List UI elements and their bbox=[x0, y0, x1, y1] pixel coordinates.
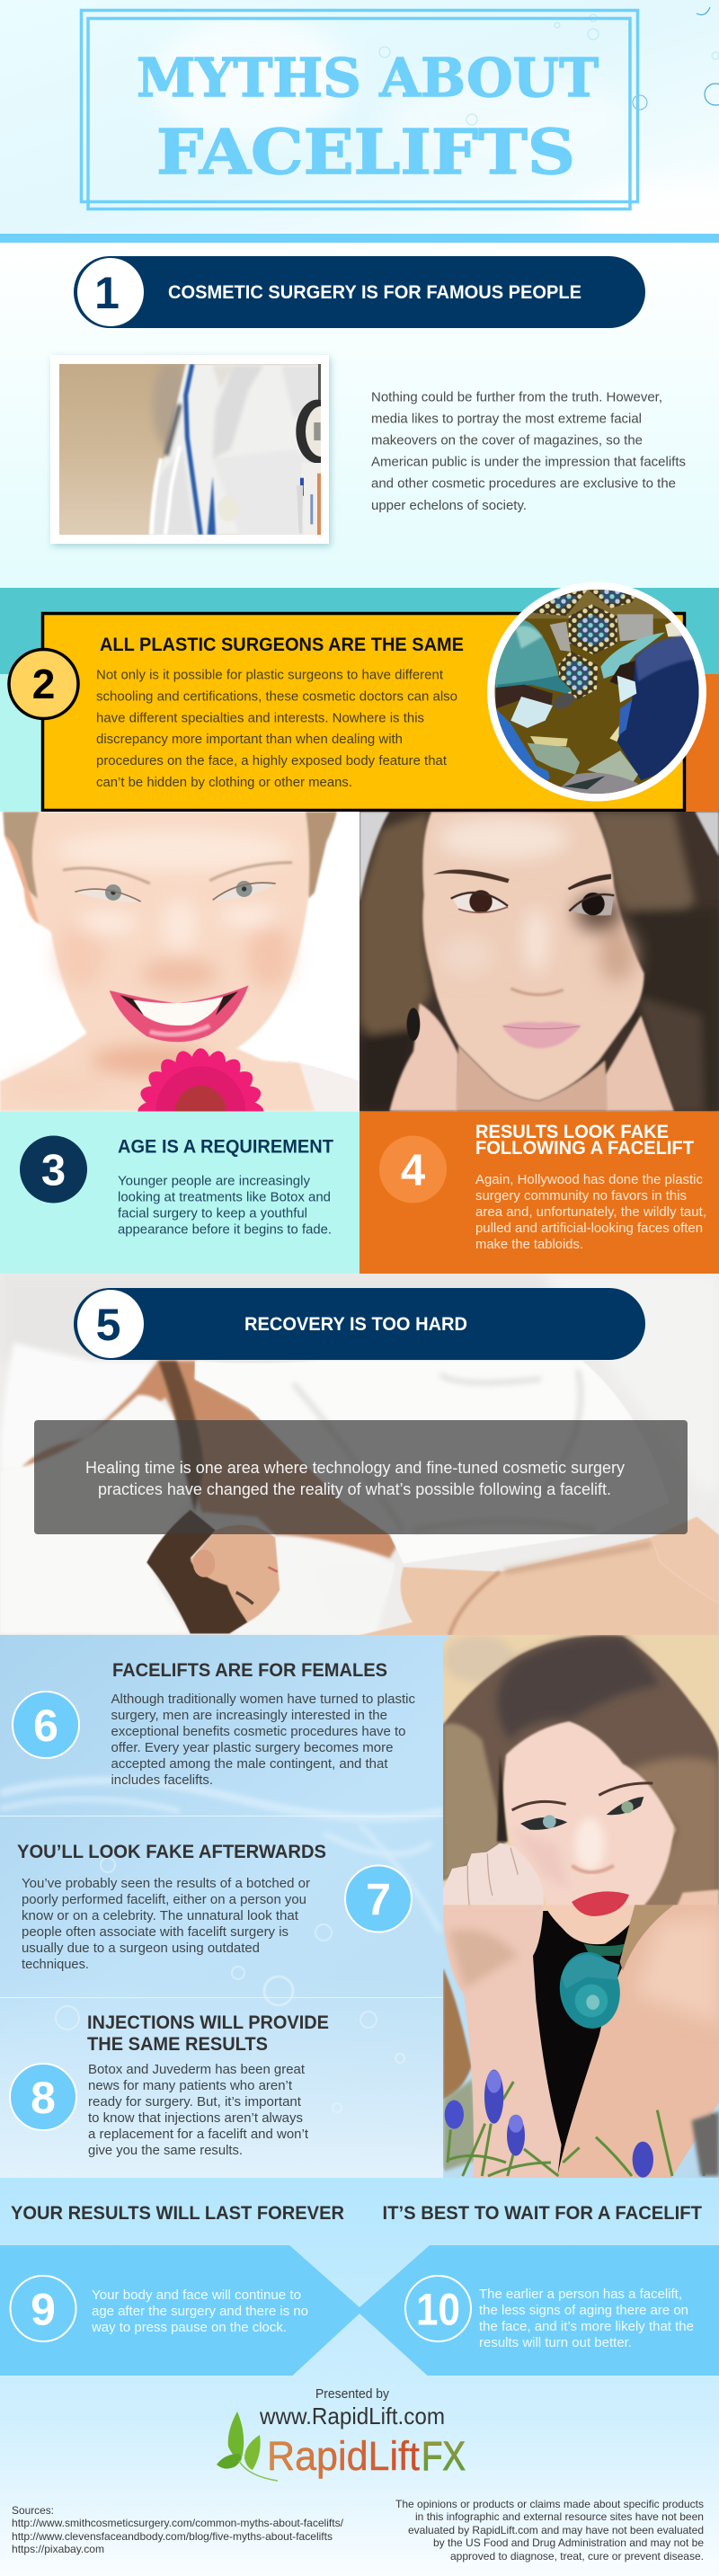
myth 6 body text: offer. Every year plastic surgery becomes more bbox=[111, 1741, 394, 1755]
myth 9 heading: YOUR RESULTS WILL LAST FOREVER bbox=[11, 2203, 344, 2224]
myth 7 number badge bbox=[345, 1866, 412, 1932]
myth 9 body text: Your body and face will continue to bbox=[92, 2288, 301, 2303]
myth 4 number badge bbox=[379, 1136, 447, 1203]
myth 1 body text: and other cosmetic procedures are exclusive to the bbox=[371, 476, 676, 492]
sources bbox=[12, 2504, 344, 2555]
myth 1 pill heading bbox=[74, 256, 645, 328]
myth 1 body text: upper echelons of society. bbox=[371, 498, 527, 513]
myth 8 number badge: 8 bbox=[31, 2073, 56, 2123]
myth 8 heading bbox=[87, 2012, 329, 2055]
myth 3 heading: AGE IS A REQUIREMENT bbox=[118, 1136, 333, 1157]
myth 5 pill heading bbox=[74, 1288, 645, 1360]
myth 4 body text: pulled and artificial-looking faces often bbox=[475, 1221, 703, 1236]
myth 10 heading: IT’S BEST TO WAIT FOR A FACELIFT bbox=[383, 2203, 702, 2224]
myth 4 heading: RESULTS LOOK FAKE bbox=[475, 1122, 669, 1142]
myth 2 body text: Not only is it possible for plastic surgeons to have different bbox=[96, 668, 444, 683]
myth 8 body text: give you the same results. bbox=[88, 2144, 243, 2158]
myth 9 body text: way to press pause on the clock. bbox=[91, 2321, 287, 2335]
myth 1 pill heading: COSMETIC SURGERY IS FOR FAMOUS PEOPLE bbox=[168, 282, 581, 303]
myth 7 body text: know or on a celebrity. The unnatural look that bbox=[22, 1909, 298, 1923]
title frame bbox=[81, 11, 638, 209]
myth 6 number badge bbox=[13, 1692, 79, 1758]
myth 6 number badge: 6 bbox=[33, 1701, 58, 1751]
myth 2 heading: ALL PLASTIC SURGEONS ARE THE SAME bbox=[100, 635, 464, 655]
myth 3 body text: Younger people are increasingly bbox=[118, 1175, 311, 1189]
myth 7 body text: poorly performed facelift, either on a person you bbox=[22, 1893, 306, 1907]
myth 2 body text: have different specialties and interests. Nowhere is this bbox=[96, 710, 424, 725]
myth 10 body text bbox=[479, 2287, 694, 2350]
logo: RapidLiftFX: RapidLift bbox=[267, 2433, 420, 2479]
panel: myth 2 bbox=[0, 580, 719, 812]
myth 4 body text bbox=[475, 1173, 706, 1252]
myth 1 body text: American public is under the impression that facelifts bbox=[371, 455, 686, 470]
myth 6 body text bbox=[111, 1692, 415, 1788]
panel: myths 9 and 10 bbox=[0, 2178, 719, 2576]
panel: myth 5 bbox=[0, 1274, 719, 1636]
myth 6 body text: exceptional benefits cosmetic procedures have to bbox=[111, 1725, 406, 1739]
myth 1 body text: makeovers on the cover of magazines, so the bbox=[371, 433, 643, 449]
myth 2 body text: can’t be hidden by clothing or other means. bbox=[96, 775, 352, 790]
panel: myth 3 bbox=[0, 1111, 360, 1274]
sources: https://pixabay.com bbox=[12, 2543, 104, 2555]
myth 6 body text: surgery, men are increasingly interested in the bbox=[111, 1709, 387, 1723]
myth 3 body text: appearance before it begins to fade. bbox=[118, 1223, 332, 1238]
myth 2 body text: procedures on the face, a highly exposed body feature that bbox=[96, 753, 448, 768]
myth 7 number badge: 7 bbox=[366, 1875, 391, 1925]
myth 7 body text: people often associate with facelift surgery is bbox=[22, 1925, 288, 1940]
myth 7 body text: techniques. bbox=[22, 1958, 89, 1972]
disclaimer: in this infographic and external resource sites have not been bbox=[415, 2510, 704, 2523]
header rule bbox=[0, 234, 719, 243]
myth 6 body text: includes facelifts. bbox=[111, 1773, 213, 1788]
photo: woman resting in bed bbox=[0, 1274, 719, 1636]
myth 4 body text: make the tabloids. bbox=[475, 1238, 583, 1252]
myth 6 body text: accepted among the male contingent, and that bbox=[111, 1757, 388, 1772]
myth 10 number badge: 10 bbox=[416, 2285, 460, 2335]
myth 4 heading: FOLLOWING A FACELIFT bbox=[475, 1138, 694, 1159]
icon: green leaves bbox=[217, 2412, 278, 2481]
myth 10 body text: results will turn out better. bbox=[479, 2336, 632, 2350]
myth 4 body text: surgery community no favors in this bbox=[475, 1189, 687, 1204]
myth 7 body text: usually due to a surgeon using outdated bbox=[22, 1941, 260, 1956]
myth 8 number badge bbox=[10, 2064, 76, 2130]
myth 5 pill heading: RECOVERY IS TOO HARD bbox=[244, 1314, 467, 1335]
myth 8 body text: ready for surgery. But, it’s important bbox=[88, 2095, 301, 2110]
myth 8 heading: THE SAME RESULTS bbox=[87, 2034, 268, 2055]
myth 1 body text: media likes to portray the most extreme facial bbox=[371, 412, 642, 427]
myth 10 body text: the less signs of aging there are on bbox=[479, 2304, 688, 2318]
sources: http://www.clevensfaceandbody.com/blog/five-myths-about-facelifts bbox=[12, 2530, 333, 2543]
myth 3 number badge bbox=[20, 1136, 87, 1203]
myth 2 body text: discrepancy more important than when dealing with bbox=[96, 732, 403, 747]
logo: RapidLiftFX: FX bbox=[422, 2433, 466, 2479]
myth 8 body text: news for many patients who aren’t bbox=[88, 2079, 292, 2093]
divider bbox=[0, 1816, 443, 1817]
myth 9 number badge: 9 bbox=[31, 2285, 56, 2335]
page background: header bbox=[0, 0, 719, 252]
myth 6 heading: FACELIFTS ARE FOR FEMALES bbox=[112, 1660, 387, 1681]
myth 8 body text: Botox and Juvederm has been great bbox=[88, 2063, 305, 2077]
myth 1 body text bbox=[371, 390, 686, 513]
panel: myth 1 bbox=[0, 243, 719, 589]
title: MYTHS ABOUT bbox=[137, 47, 599, 109]
photo: doctor coat bbox=[50, 355, 339, 544]
myth 3 body text: facial surgery to keep a youthful bbox=[118, 1207, 307, 1221]
disclaimer: approved to diagnose, treat, cure or prevent disease. bbox=[450, 2550, 704, 2563]
photo: woman with teal rose bbox=[443, 1635, 719, 2181]
myth 9 banner bbox=[0, 2245, 360, 2376]
myth 5 text overlay: Healing time is one area where technology and fine-tuned cosmetic surgery bbox=[85, 1459, 625, 1477]
disclaimer: evaluated by RapidLift.com and may have not been evaluated bbox=[408, 2524, 704, 2536]
disclaimer: by the US Food and Drug Administration and may not be bbox=[433, 2536, 704, 2549]
myth 2 body text bbox=[96, 668, 457, 790]
sources: Sources: bbox=[12, 2504, 54, 2517]
myth 4 body text: area and, unfortunately, the wildly taut, bbox=[475, 1205, 706, 1220]
disclaimer bbox=[395, 2498, 704, 2563]
myth 7 body text bbox=[22, 1877, 310, 1972]
myth 7 heading: YOU’LL LOOK FAKE AFTERWARDS bbox=[17, 1842, 326, 1862]
myth 2 body text: schooling and certifications, these cosmetic doctors can also bbox=[96, 688, 457, 704]
myth 6 body text: Although traditionally women have turned to plastic bbox=[111, 1692, 415, 1707]
myth 4 number badge: 4 bbox=[401, 1147, 425, 1195]
disclaimer: The opinions or products or claims made about specific products bbox=[395, 2498, 704, 2510]
title: FACELIFTS bbox=[156, 117, 575, 189]
myth 10 body text: the face, and it’s more likely that the bbox=[479, 2320, 694, 2334]
myth 10 body text: The earlier a person has a facelift, bbox=[479, 2287, 682, 2302]
panel: myths 6 to 8 bbox=[0, 1635, 719, 2181]
myth 9 body text: age after the surgery and there is no bbox=[92, 2305, 308, 2319]
panel: myth 4 bbox=[360, 1111, 719, 1274]
myth 4 heading bbox=[475, 1122, 694, 1159]
myth 2 number badge bbox=[9, 649, 78, 719]
presented by line: Presented by bbox=[315, 2387, 390, 2402]
myth 5 text overlay bbox=[34, 1420, 688, 1534]
myth 8 body text: a replacement for a facelift and won’t bbox=[88, 2127, 308, 2142]
myth 3 body text: looking at treatments like Botox and bbox=[118, 1191, 331, 1205]
myth 8 heading: INJECTIONS WILL PROVIDE bbox=[87, 2012, 329, 2033]
logo: RapidLiftFX bbox=[217, 2412, 466, 2481]
title bbox=[137, 47, 599, 189]
myth 4 body text: Again, Hollywood has done the plastic bbox=[475, 1173, 703, 1187]
myth 9 body text bbox=[91, 2288, 308, 2335]
myth 1 body text: Nothing could be further from the truth. However, bbox=[371, 390, 662, 404]
myth 8 body text: to know that injections aren’t always bbox=[88, 2111, 303, 2126]
myth 7 body text: You’ve probably seen the results of a botched or bbox=[22, 1877, 310, 1891]
myth 10 number badge bbox=[405, 2276, 471, 2341]
myth 9 number badge bbox=[11, 2276, 75, 2341]
lips bbox=[572, 1891, 629, 1916]
photo: woman with long dark hair bbox=[360, 812, 719, 1111]
myth 10 banner bbox=[360, 2245, 719, 2376]
sources: http://www.smithcosmeticsurgery.com/common-myths-about-facelifts/ bbox=[12, 2517, 344, 2529]
myth 2 number badge: 2 bbox=[32, 661, 55, 707]
myth 1 pill heading: 1 bbox=[94, 268, 120, 318]
myth 5 text overlay: practices have changed the reality of what’s possible following a facelift. bbox=[98, 1480, 611, 1498]
myth 3 body text bbox=[118, 1175, 332, 1238]
website url: www.RapidLift.com bbox=[259, 2403, 445, 2429]
photo: surgeons in operating room bbox=[485, 580, 710, 804]
photo: smiling woman with pink flower bbox=[0, 812, 360, 1156]
myth 3 number badge: 3 bbox=[41, 1147, 66, 1195]
myth 8 body text bbox=[88, 2063, 308, 2158]
myth 5 pill heading: 5 bbox=[96, 1300, 120, 1350]
